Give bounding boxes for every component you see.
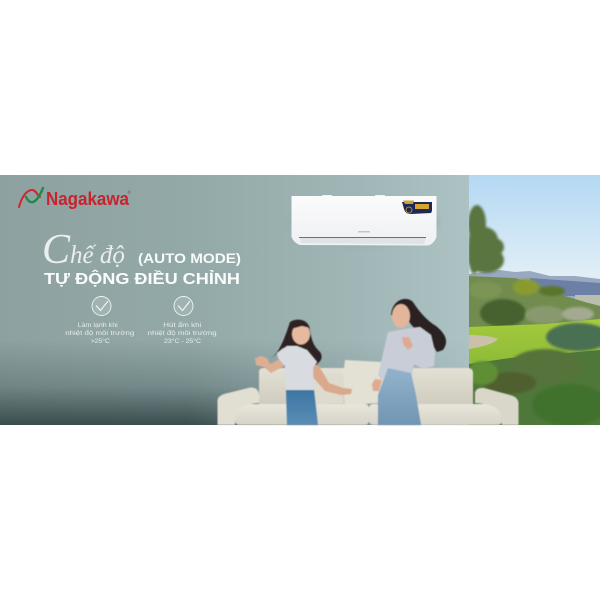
- cushions: [313, 373, 343, 404]
- heading: auto mode: (AUTO MODE): [138, 250, 241, 266]
- heading: [42, 227, 241, 288]
- hand and arm: [372, 379, 382, 391]
- cooling caption: >25°C: [91, 337, 110, 345]
- hair: [391, 299, 446, 352]
- logo: Nagakawa: [19, 188, 132, 209]
- jeans: [378, 368, 421, 425]
- registered mark: ®: [128, 189, 132, 195]
- cooling caption: nhiệt độ môi trường: [65, 330, 135, 337]
- jeans: [286, 390, 318, 425]
- dehumidify caption: Hút ẩm khi: [163, 321, 202, 329]
- cooling caption: Làm lạnh khi: [78, 322, 118, 329]
- energy label sticker: [402, 200, 432, 214]
- blouse: [378, 327, 435, 380]
- shirt: [277, 346, 317, 392]
- woman: [372, 299, 446, 425]
- script heading: Chế độ: Chế độ: [42, 227, 125, 273]
- left arm: [255, 356, 284, 373]
- wall background: [0, 175, 470, 425]
- hair: [272, 320, 322, 368]
- banner illustration: [0, 175, 600, 426]
- logo swoosh icon: [19, 188, 43, 207]
- sofa arms: [218, 387, 259, 425]
- face: [392, 304, 410, 328]
- dehumidify caption: nhiệt độ môi trường: [148, 330, 217, 337]
- feature: dehumidify: [148, 296, 219, 345]
- sofa: [218, 360, 518, 425]
- tree: [468, 205, 504, 274]
- outdoor landscape: [468, 175, 600, 426]
- icon: check circle: [92, 296, 111, 316]
- dehumidify caption: 23°C - 25°C: [164, 337, 201, 345]
- feature: cooling: [65, 296, 136, 345]
- girl: [255, 320, 352, 425]
- icon: check circle: [174, 296, 193, 316]
- logo wordmark: Nagakawa: [46, 189, 130, 209]
- face: [292, 324, 310, 344]
- right arm: [312, 365, 352, 395]
- air conditioner: [291, 195, 439, 246]
- heading: tự động điều chỉnh: TỰ ĐỘNG ĐIỀU CHỈNH: [44, 269, 240, 288]
